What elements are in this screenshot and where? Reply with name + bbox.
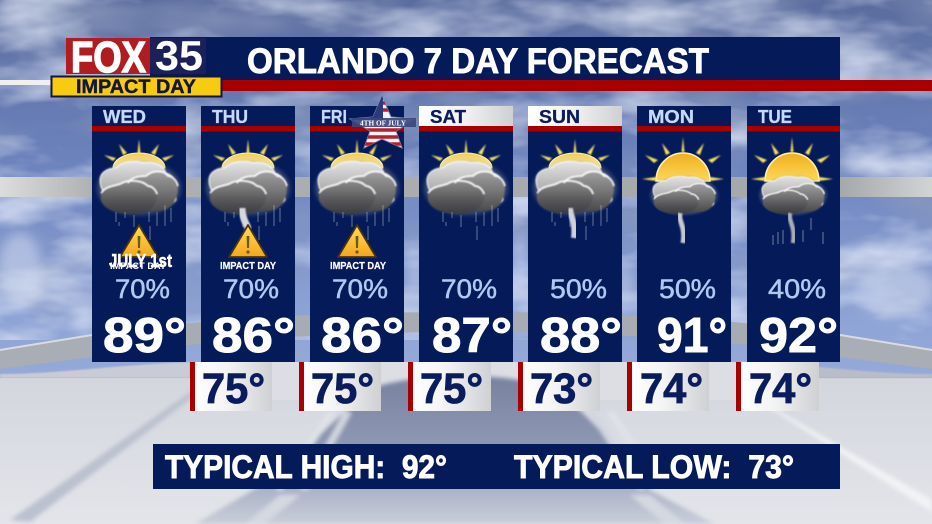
logo: FOX 35: FOX [71, 33, 146, 82]
title: ORLANDO 7 DAY FORECAST [247, 42, 709, 81]
day label: WED [103, 107, 146, 127]
typical temperatures bar [153, 444, 840, 489]
rain chance: 70% [332, 274, 388, 304]
icon: warning triangle [229, 225, 267, 257]
icon: storm with rain [424, 139, 508, 240]
panel: Friday [310, 106, 404, 363]
rain chance: 50% [659, 274, 716, 304]
icon: storm with partial sun [315, 139, 399, 240]
icon: storm with partial sun [97, 139, 181, 240]
impact day banner [52, 76, 222, 98]
icon: storm with lightning [533, 139, 617, 240]
icon: bright sun with storm cloud [751, 137, 833, 245]
high temperature: 88° [540, 309, 622, 363]
date label: JULY 1st [109, 251, 172, 271]
high temperature: 87° [432, 309, 512, 363]
rain chance: 70% [441, 274, 497, 304]
low temperature: Thursday: 75° [311, 365, 374, 413]
typical low: TYPICAL LOW: 73° [514, 449, 794, 485]
panel: Wednesday [92, 106, 186, 363]
high temperature: 89° [103, 309, 186, 363]
header bar: title band [0, 37, 932, 91]
day label: SUN [539, 107, 580, 127]
impact label: IMPACT DAY [220, 261, 276, 272]
low temperature: Wednesday: 75° [202, 365, 265, 413]
low temperature: Monday: 74° [749, 365, 812, 413]
panel: Thursday [201, 106, 295, 363]
icon: warning triangle [120, 225, 158, 257]
day label: SAT [430, 107, 466, 127]
high temperature: 91° [657, 309, 727, 363]
icon: 4th of July star badge: 4TH OF JULY [360, 120, 406, 128]
high temperature: 86° [212, 309, 295, 363]
day label: TUE [758, 107, 792, 127]
day label: FRI [321, 107, 347, 127]
low temperature: Saturday: 73° [530, 365, 593, 413]
logo: FOX 35: 35 [155, 32, 203, 79]
icon: storm with lightning [206, 139, 290, 240]
rain chance: 40% [768, 274, 826, 304]
low temperature: Friday: 75° [420, 365, 483, 413]
panel: Sunday [528, 106, 622, 363]
panel: Tuesday [747, 106, 840, 363]
low temperature: Sunday: 74° [640, 365, 703, 413]
high temperature: 92° [759, 309, 838, 363]
panel: Saturday [419, 106, 513, 363]
logo: FOX 35 [66, 32, 206, 82]
rain chance: 50% [550, 274, 607, 304]
impact day banner: IMPACT DAY [76, 77, 196, 98]
day label: THU [212, 107, 248, 127]
day label: MON [648, 107, 694, 127]
icon: bright sun with storm cloud [642, 137, 724, 243]
rain chance: 70% [115, 274, 170, 304]
panel: Monday [637, 106, 731, 363]
icon: 4th of July star badge [350, 96, 416, 148]
impact label: IMPACT DAY [330, 261, 386, 272]
icon: warning triangle [338, 225, 376, 257]
label behind the date: IMPACT DAY [110, 261, 167, 272]
rain chance: 70% [223, 274, 279, 304]
high temperature: 86° [321, 309, 404, 363]
typical high: TYPICAL HIGH: 92° [165, 449, 447, 485]
